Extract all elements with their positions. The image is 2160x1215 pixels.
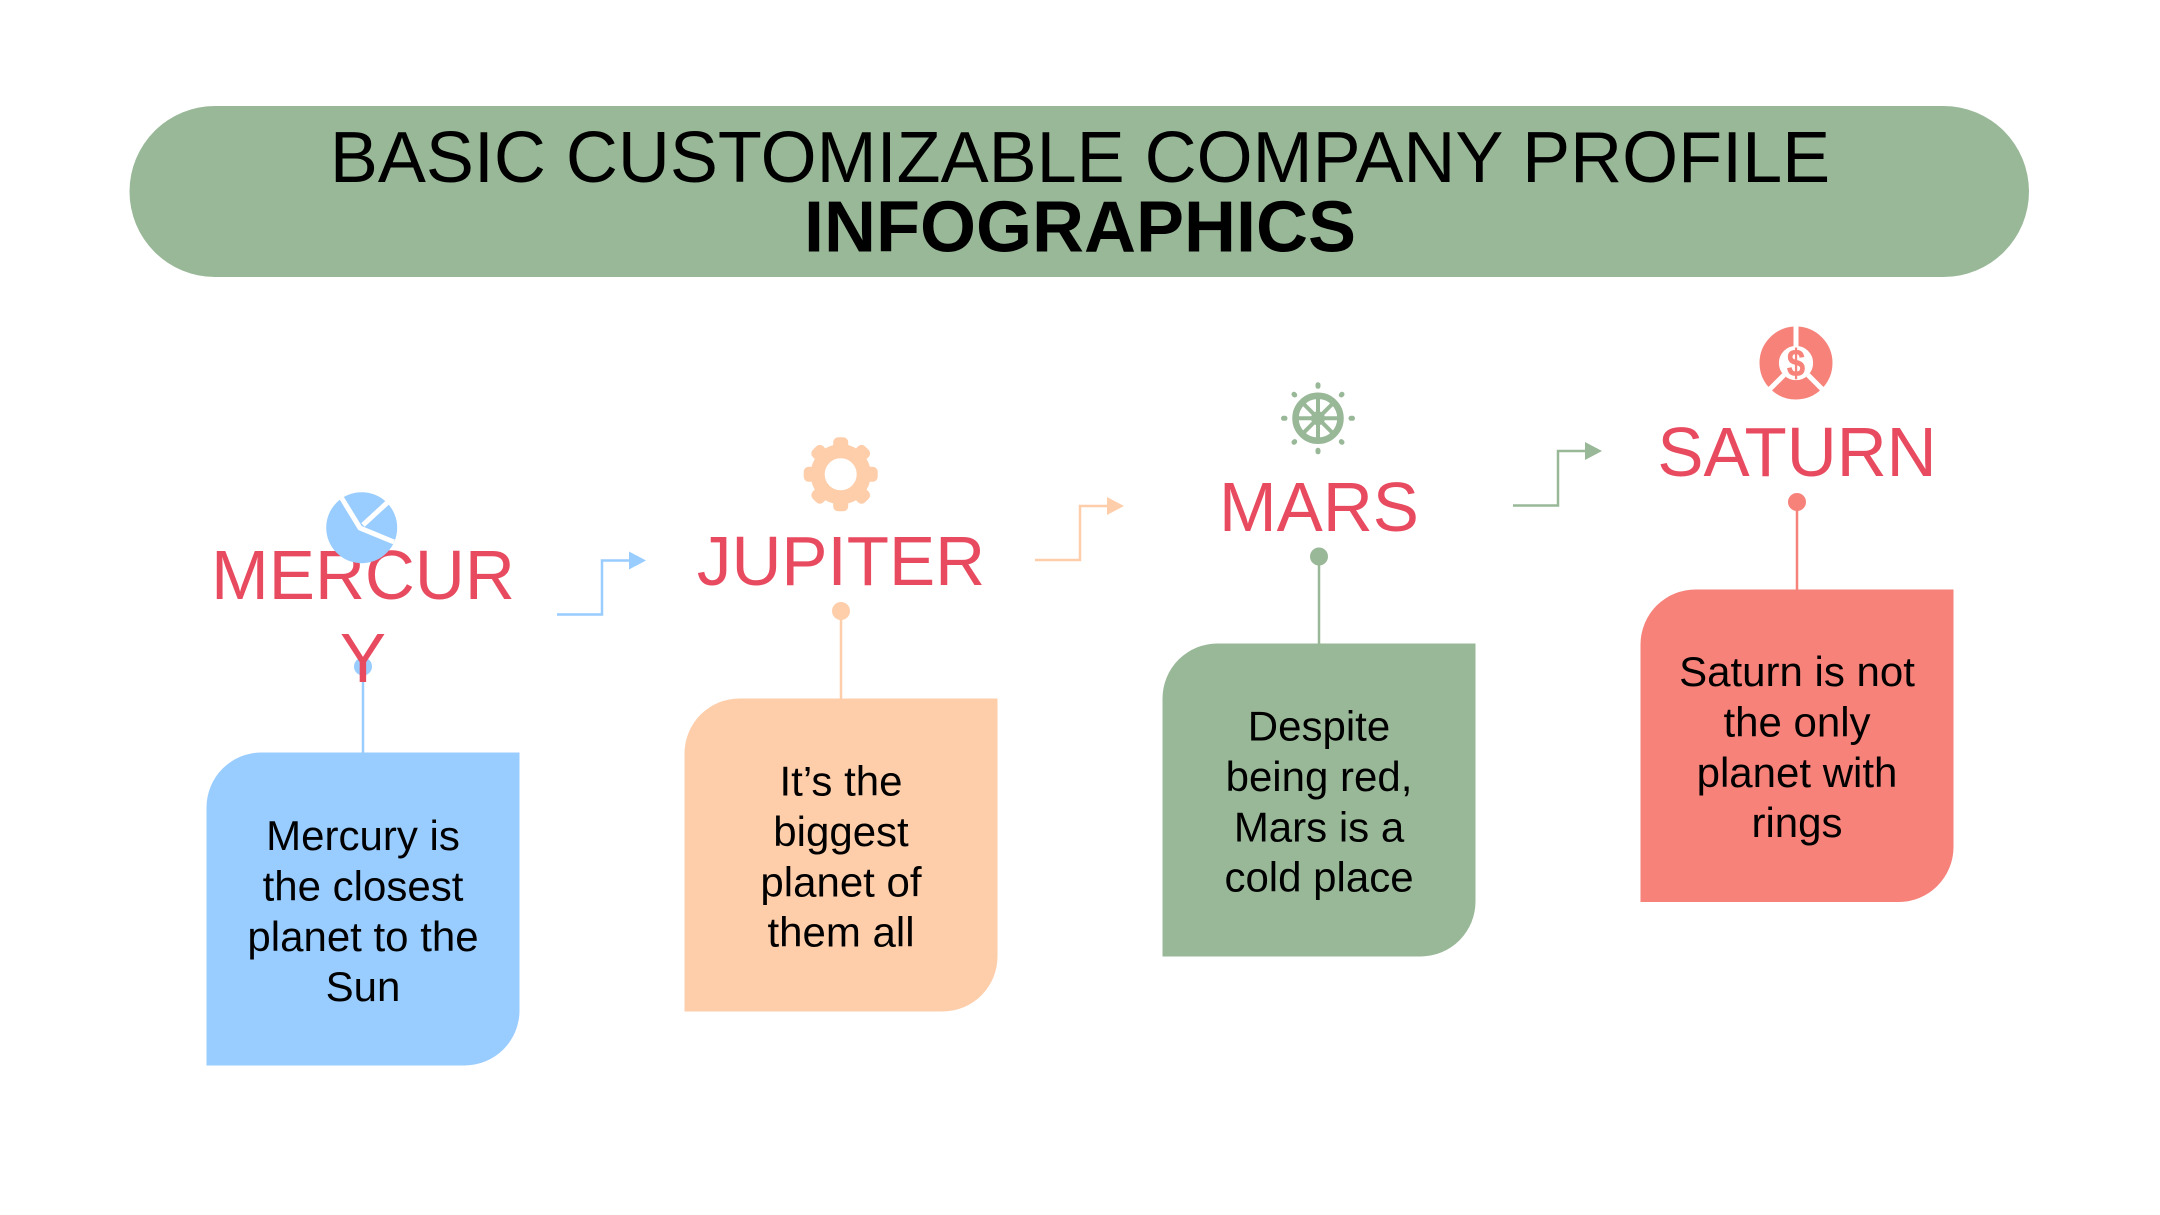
card: Saturn xyxy=(1640,589,1954,902)
text: Mercury description xyxy=(247,812,479,1010)
title line 1: BASIC CUSTOMIZABLE COMPANY PROFILE xyxy=(330,118,1830,198)
arrow: Mars to Saturn xyxy=(1513,442,1602,506)
arrow: Jupiter to Mars xyxy=(1035,497,1124,560)
icon: gear xyxy=(804,437,878,511)
text: Jupiter description: planet of xyxy=(760,858,922,905)
connector: Mercury xyxy=(354,658,372,753)
connector: Jupiter xyxy=(832,602,850,699)
text: Saturn description: the only xyxy=(1723,698,1871,745)
connector: Saturn xyxy=(1788,493,1806,590)
text: Jupiter description: biggest xyxy=(773,808,909,855)
text: Mercury description: planet to the xyxy=(247,913,479,960)
text: Mars description: Mars is a xyxy=(1234,803,1405,850)
connector: Mars xyxy=(1310,548,1328,644)
panel: Saturn xyxy=(1640,323,1954,902)
card: Jupiter xyxy=(684,698,998,1012)
text: Saturn description: rings xyxy=(1751,799,1843,846)
heading: Saturn: SATURN xyxy=(1657,413,1937,491)
text: Jupiter description: them all xyxy=(767,909,915,956)
title line 2: INFOGRAPHICS xyxy=(804,188,1356,268)
icon: dollar pie xyxy=(1767,323,1825,392)
icon: dollar pie: $ xyxy=(1787,343,1805,385)
card: Mars xyxy=(1162,643,1476,956)
text: Saturn description xyxy=(1679,648,1915,846)
title banner xyxy=(130,106,2029,277)
text: Mars description xyxy=(1224,702,1414,901)
text: Saturn description: Saturn is not xyxy=(1679,648,1915,695)
panel: Mercury xyxy=(206,492,520,1066)
icon: ship wheel xyxy=(1284,385,1352,452)
text: Mars description: cold place xyxy=(1224,854,1414,901)
heading: Mars: MARS xyxy=(1219,468,1419,546)
text: Mars description: Despite xyxy=(1248,702,1390,750)
text: Mercury description: the closest xyxy=(263,862,464,909)
text: Mercury description: Mercury is xyxy=(266,812,460,859)
text: Jupiter description: It’s the xyxy=(780,758,902,804)
panel: Jupiter xyxy=(684,437,998,1012)
icon: pie chart xyxy=(326,492,397,563)
card: Mercury xyxy=(206,752,520,1066)
text: Saturn description: planet with xyxy=(1697,749,1897,796)
heading: Mercury: Y xyxy=(340,619,386,697)
text: Mars description: being red, xyxy=(1226,753,1412,800)
heading: Jupiter: JUPITER xyxy=(697,522,985,600)
panel: Mars xyxy=(1162,385,1476,956)
heading: Mercury: MERCUR xyxy=(211,536,515,614)
arrow: Mercury to Jupiter xyxy=(557,552,646,614)
heading: Mercury xyxy=(211,536,515,697)
text: Jupiter description xyxy=(760,758,922,956)
text: Mercury description: Sun xyxy=(326,963,400,1010)
